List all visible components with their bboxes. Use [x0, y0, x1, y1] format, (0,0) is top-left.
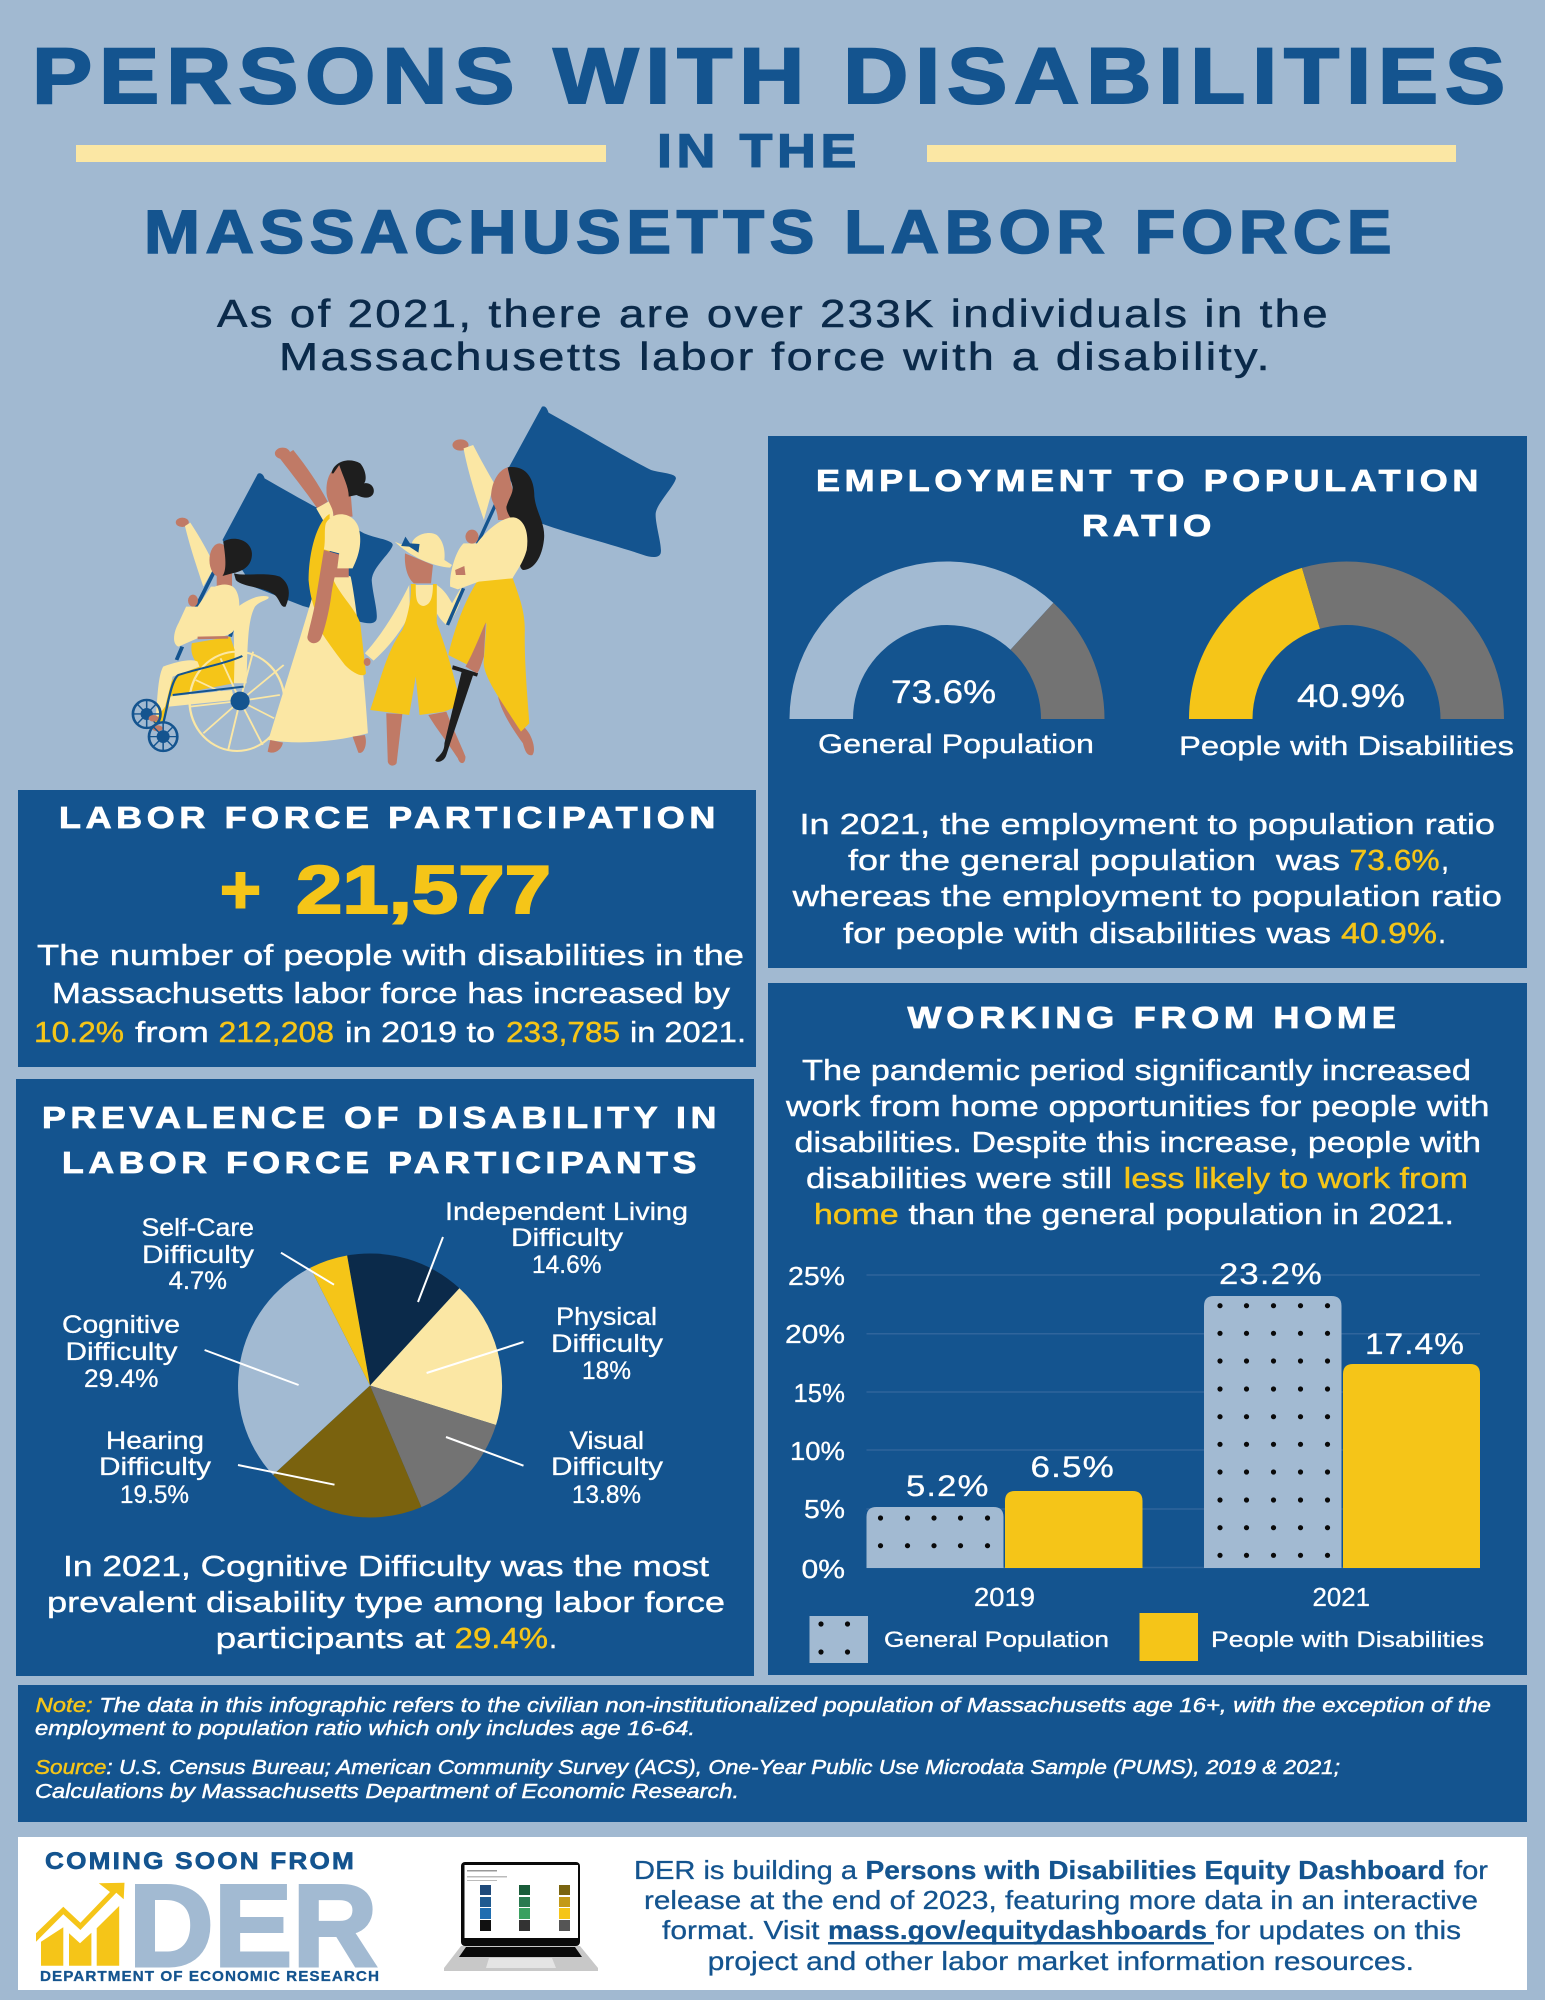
- icon: laptop showing dashboard: [444, 1862, 598, 1971]
- gauge: people with disabilities 40.9%: 40.9%: [1297, 678, 1405, 714]
- text block: working from home description: less likely to work from: [1124, 1163, 1468, 1195]
- figure: woman in sari: [268, 448, 374, 753]
- text block: dashboard announcement: project and other labor market information resources.: [708, 1946, 1414, 1976]
- pie chart: [205, 1237, 524, 1518]
- bar: 2021 people with disabilities: 17.4%: [1365, 1328, 1465, 1361]
- label: self-care difficulty: Self-Care: [142, 1214, 254, 1242]
- text block: dashboard announcement: mass.gov/equitydashboards: [828, 1915, 1207, 1945]
- text block: source: Source : U.S. Census Bureau; American Community Survey (ACS), One-Year Public Use Microdata Sample (PUMS), 2019 & 2021;: [35, 1757, 1340, 1779]
- label: independent living difficulty: [445, 1198, 688, 1279]
- bar: 2021 general population: 23.2%: [1219, 1258, 1323, 1291]
- text block: labor force description: 212,208: [218, 1017, 334, 1049]
- text block: labor force description: 10.2%: [34, 1017, 124, 1049]
- bar: 2019 people with disabilities: [1005, 1451, 1142, 1568]
- y axis labels: 5%: [804, 1494, 845, 1524]
- label: self-care difficulty: 4.7%: [169, 1267, 227, 1295]
- text block: employment description: whereas the employment to population ratio: [791, 881, 1502, 913]
- text block: employment description: for the general population was: [848, 845, 1340, 877]
- label: hearing difficulty: 19.5%: [120, 1481, 189, 1509]
- text block: employment description: ,: [1441, 845, 1449, 877]
- text block: note: employment to population ratio which only includes age 16-64.: [35, 1718, 695, 1740]
- subtitle: As of 2021, there are over 233K individuals in the: [217, 293, 1330, 336]
- text block: source: [35, 1757, 1340, 1803]
- label: hearing difficulty: Difficulty: [99, 1453, 212, 1481]
- panel: coming soon: [18, 1837, 1527, 1991]
- text block: working from home description: [785, 1055, 1490, 1231]
- bar: 2021 general population: [1204, 1258, 1342, 1568]
- heading: employment to population ratio: EMPLOYMENT TO POPULATION: [816, 463, 1483, 498]
- bar: 2021 people with disabilities: [1343, 1328, 1480, 1568]
- text block: labor force description: The number of people with disabilities in the: [37, 940, 744, 972]
- text block: prevalence description: participants at: [216, 1623, 445, 1655]
- panel: working from home: [768, 983, 1527, 1675]
- label: visual difficulty: Visual: [570, 1427, 644, 1455]
- text block: labor force description: from: [135, 1017, 209, 1049]
- y axis labels: 10%: [790, 1436, 845, 1466]
- text block: prevalence description: In 2021, Cognitive Difficulty was the most: [63, 1551, 709, 1583]
- panel: employment to population ratio: [768, 436, 1527, 968]
- label: physical difficulty: [551, 1303, 664, 1385]
- text block: dashboard announcement: format. Visit: [662, 1915, 820, 1945]
- heading: working from home: WORKING FROM HOME: [908, 1000, 1400, 1035]
- y axis labels: 0%: [802, 1554, 845, 1584]
- gauge: general population 73.6%: General Population: [818, 729, 1094, 759]
- gauge: people with disabilities 40.9%: People with Disabilities: [1179, 731, 1514, 761]
- x axis labels: 2021: [1312, 1582, 1370, 1612]
- label: independent living difficulty: 14.6%: [532, 1251, 602, 1279]
- icon: left flag: [222, 473, 393, 623]
- text block: prevalence description: prevalent disability type among labor force: [47, 1587, 725, 1619]
- label: hearing difficulty: [99, 1427, 212, 1509]
- bar: 2019 people with disabilities: 6.5%: [1030, 1451, 1115, 1484]
- y axis labels: 20%: [785, 1319, 845, 1349]
- text block: working from home description: disabilities. Despite this increase, people with: [794, 1127, 1481, 1159]
- text block: source: Calculations by Massachusetts Department of Economic Research.: [35, 1781, 739, 1803]
- text block: note: [35, 1695, 1491, 1740]
- legend: General Population: [884, 1627, 1109, 1652]
- illustration: people with disabilities marching with flags: [133, 406, 676, 766]
- label: physical difficulty: Difficulty: [551, 1330, 664, 1358]
- label: cognitive difficulty: Difficulty: [66, 1338, 178, 1366]
- title: [32, 31, 1512, 266]
- y axis labels: 25%: [788, 1261, 845, 1291]
- text block: working from home description: The pandemic period significantly increased: [802, 1055, 1471, 1087]
- text block: prevalence description: [47, 1551, 725, 1655]
- legend: People with Disabilities: [1211, 1627, 1484, 1652]
- label: cognitive difficulty: 29.4%: [84, 1365, 158, 1393]
- text block: employment description: 73.6%: [1350, 845, 1440, 877]
- text block: note: Note: The data in this infographic refers to the civilian non-institutionalized population of Massachusetts age 16+, with the exception of the: [36, 1695, 1491, 1717]
- gauge: people with disabilities 40.9%: [1179, 561, 1514, 761]
- title: IN THE: [657, 124, 861, 177]
- bar: 2019 general population: [866, 1470, 1004, 1568]
- title: MASSACHUSETTS LABOR FORCE: [144, 198, 1397, 266]
- title: PERSONS WITH DISABILITIES: [32, 31, 1512, 120]
- figure: woman in wheelchair: [133, 518, 289, 751]
- label: independent living difficulty: Independent Living: [445, 1198, 688, 1226]
- bar: 2019 general population: 5.2%: [906, 1470, 990, 1503]
- text block: dashboard announcement: for: [1454, 1855, 1488, 1885]
- bar chart: [785, 1258, 1480, 1612]
- heading: prevalence of disability: PREVALENCE OF DISABILITY IN: [42, 1100, 721, 1135]
- y axis labels: 15%: [794, 1378, 845, 1408]
- x axis labels: [974, 1582, 1370, 1612]
- gauge: general population 73.6%: [790, 562, 1104, 759]
- logo: department of economic research: DEPARTMENT OF ECONOMIC RESEARCH: [40, 1968, 380, 1985]
- gauge: general population 73.6%: 73.6%: [891, 674, 996, 710]
- big number: [220, 852, 551, 928]
- logo: department of economic research: DER: [129, 1860, 378, 1991]
- label: cognitive difficulty: [62, 1311, 180, 1393]
- legend: [810, 1613, 1484, 1663]
- icon: right flag: [506, 406, 676, 557]
- label: visual difficulty: 13.8%: [572, 1481, 641, 1509]
- text block: working from home description: home: [814, 1199, 899, 1231]
- label: independent living difficulty: Difficulty: [511, 1224, 624, 1252]
- figure: woman with prosthetic leg: [435, 439, 544, 762]
- text block: employment description: [791, 809, 1502, 950]
- heading: prevalence of disability: [42, 1100, 721, 1180]
- label: physical difficulty: Physical: [556, 1303, 657, 1331]
- text block: employment description: for people with disabilities was: [843, 918, 1331, 950]
- heading: coming soon from: COMING SOON FROM: [45, 1848, 356, 1875]
- text block: dashboard announcement: DER is building a: [634, 1855, 858, 1885]
- text block: labor force description: [34, 940, 746, 1049]
- big number: +: [220, 852, 261, 928]
- label: cognitive difficulty: Cognitive: [62, 1311, 180, 1339]
- label: visual difficulty: [551, 1427, 664, 1509]
- label: hearing difficulty: Hearing: [106, 1427, 204, 1455]
- text block: labor force description: in 2021.: [630, 1017, 746, 1049]
- text block: dashboard announcement: for updates on this: [1216, 1915, 1461, 1945]
- text block: dashboard announcement: [634, 1855, 1488, 1976]
- figure: child with hat: [364, 533, 465, 766]
- subtitle: [217, 293, 1330, 379]
- y axis labels: [785, 1261, 845, 1584]
- text block: working from home description: work from home opportunities for people with: [785, 1091, 1490, 1123]
- subtitle: Massachusetts labor force with a disability.: [279, 336, 1272, 379]
- panel: prevalence of disability: [16, 1079, 754, 1676]
- text block: labor force description: Massachusetts labor force has increased by: [52, 978, 731, 1010]
- text block: working from home description: than the general population in 2021.: [908, 1199, 1454, 1231]
- x axis labels: 2019: [974, 1582, 1035, 1612]
- icon: rising chart arrow: [36, 1883, 124, 1966]
- label: self-care difficulty: [142, 1214, 255, 1295]
- text block: labor force description: 233,785: [506, 1017, 620, 1049]
- text block: dashboard announcement: release at the end of 2023, featuring more data in an interactive: [644, 1885, 1478, 1915]
- big number: 21,577: [296, 852, 551, 928]
- text block: employment description: In 2021, the employment to population ratio: [800, 809, 1495, 841]
- heading: labor force participation: LABOR FORCE PARTICIPATION: [59, 800, 720, 835]
- text block: employment description: 40.9%: [1341, 918, 1437, 950]
- text block: prevalence description: 29.4%: [455, 1623, 548, 1655]
- text block: employment description: .: [1438, 918, 1446, 950]
- heading: employment to population ratio: [816, 463, 1483, 543]
- label: physical difficulty: 18%: [582, 1357, 631, 1385]
- label: self-care difficulty: Difficulty: [142, 1241, 255, 1269]
- text block: prevalence description: .: [549, 1623, 557, 1655]
- panel: labor force participation: [18, 790, 756, 1067]
- heading: employment to population ratio: RATIO: [1082, 508, 1216, 543]
- heading: prevalence of disability: LABOR FORCE PARTICIPANTS: [62, 1145, 701, 1180]
- text block: dashboard announcement: Persons with Disabilities Equity Dashboard: [866, 1855, 1445, 1885]
- panel: note and source: [18, 1685, 1527, 1822]
- text block: working from home description: disabilities were still: [806, 1163, 1112, 1195]
- text block: labor force description: in 2019 to: [345, 1017, 495, 1049]
- label: visual difficulty: Difficulty: [551, 1453, 664, 1481]
